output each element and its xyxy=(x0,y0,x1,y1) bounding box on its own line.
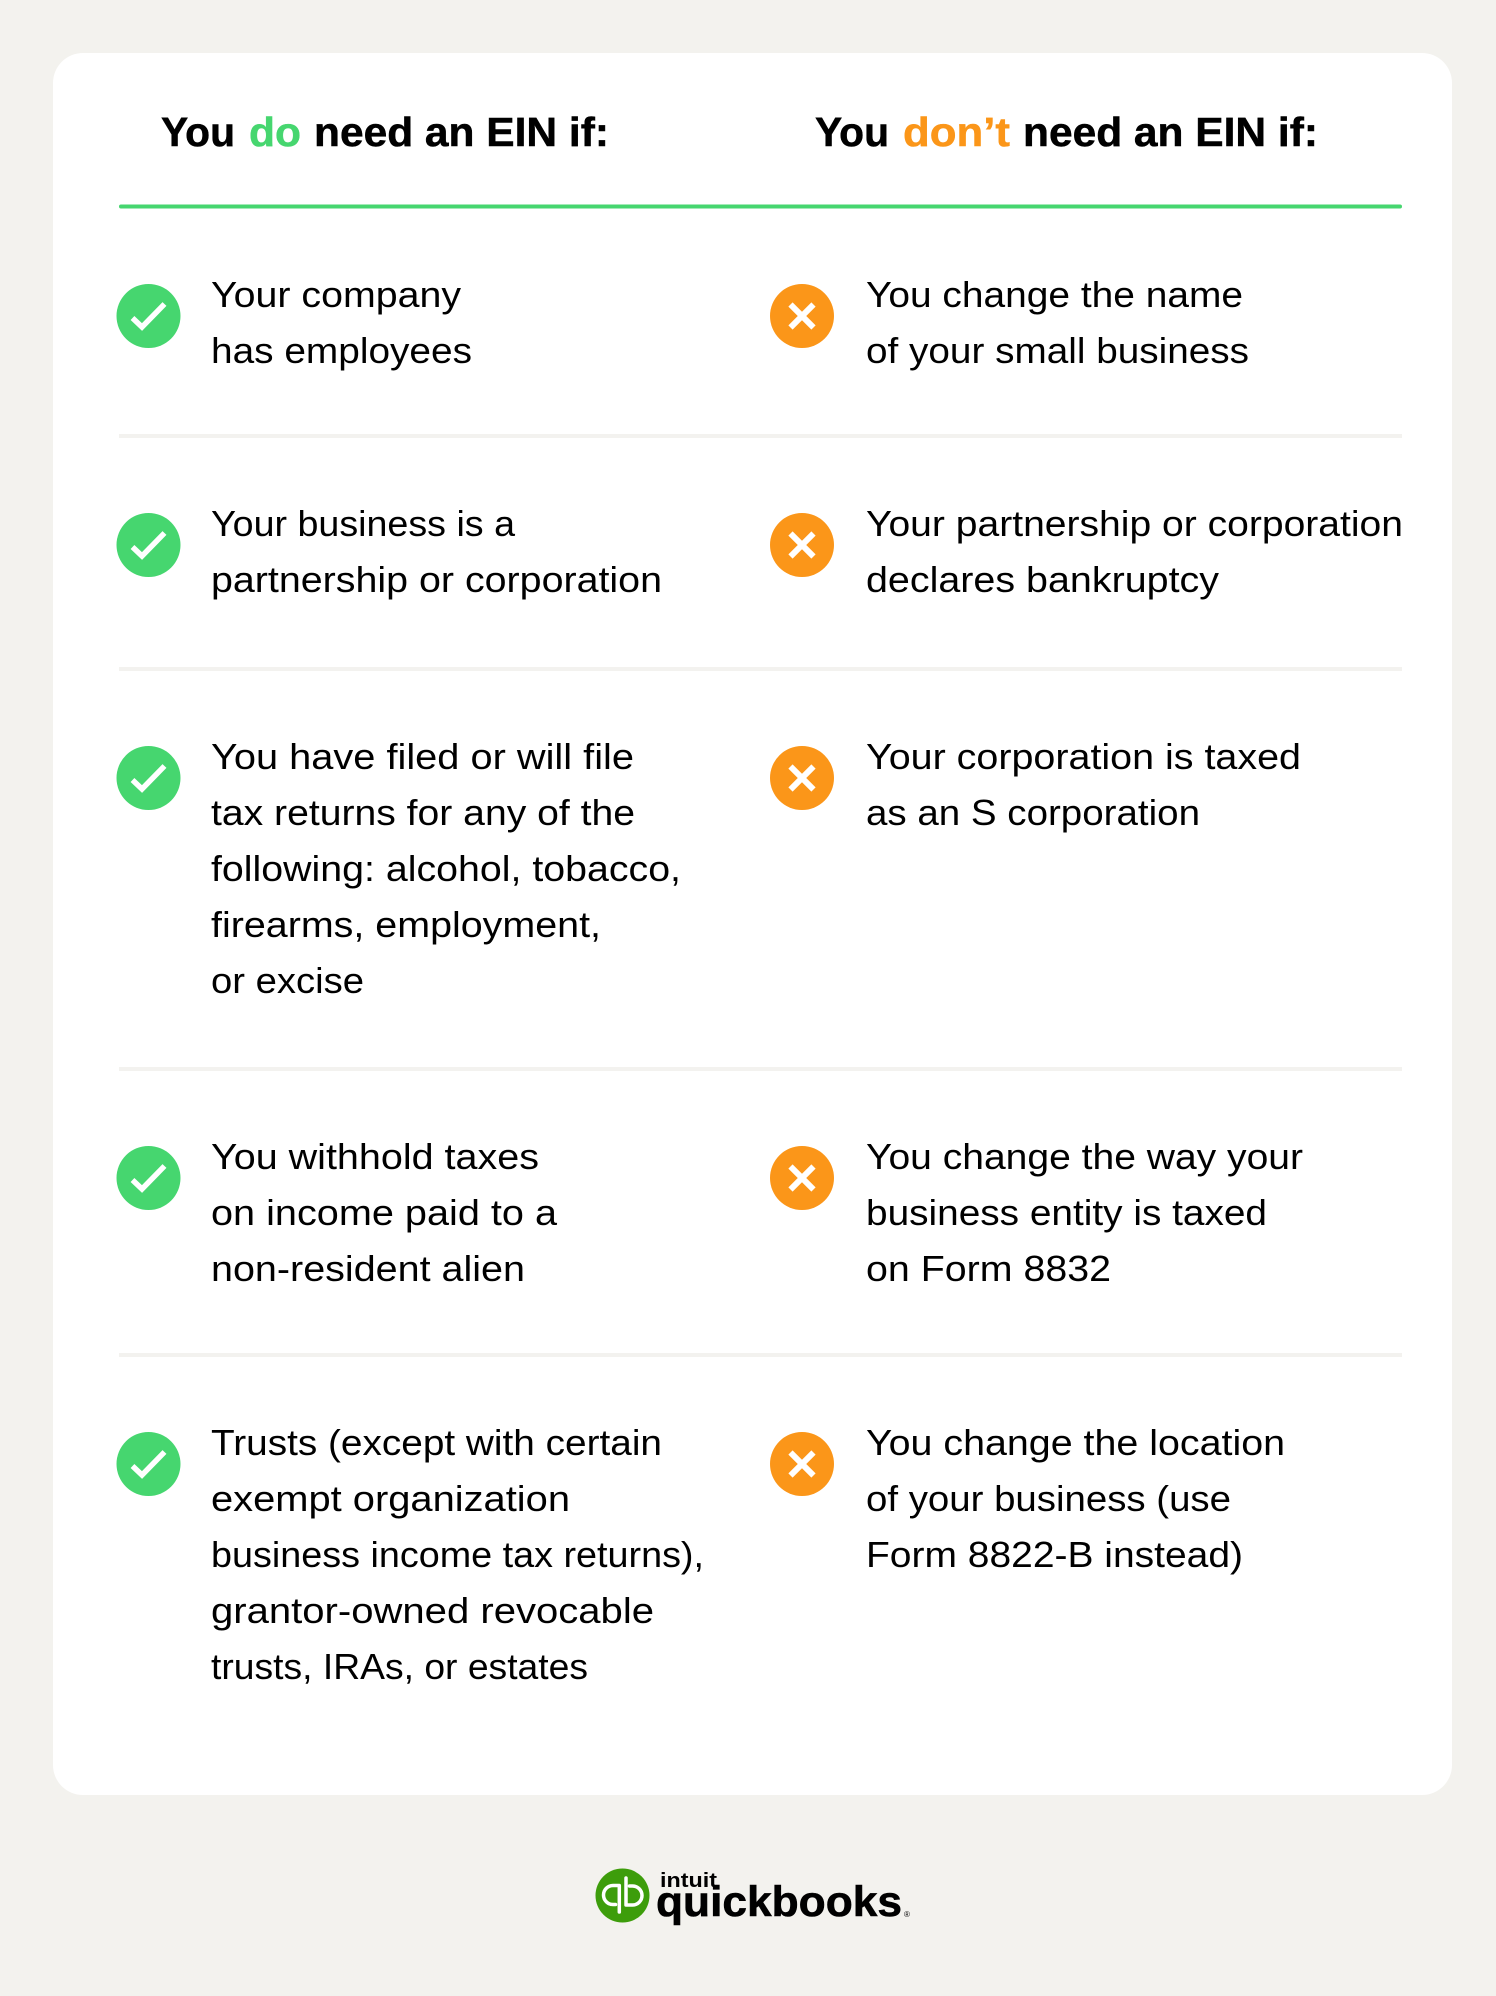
row 2 not needed: bankruptcy xyxy=(770,503,1403,600)
text: bankruptcy xyxy=(866,503,1403,600)
wordmark: intuit: intuit xyxy=(660,1870,717,1892)
icon: green check xyxy=(116,513,180,577)
text: location: You change the location xyxy=(866,1422,1285,1463)
row 4 need: withholding xyxy=(116,1136,558,1289)
icon: orange cross xyxy=(770,1432,834,1496)
icon: green check xyxy=(116,1432,180,1496)
text: withholding: on income paid to a xyxy=(211,1192,558,1233)
heading: you don't need an EIN xyxy=(815,109,1318,155)
icon: quickbooks mark xyxy=(596,1868,650,1922)
heading: you do need an EIN: need an EIN if: xyxy=(314,109,609,155)
heading: you do need an EIN: You xyxy=(161,109,235,155)
row 2 need: partnership xyxy=(116,503,662,600)
text: location: Form 8822-B instead) xyxy=(866,1534,1243,1575)
text: bankruptcy: Your partnership or corporation xyxy=(866,503,1403,544)
icon: orange cross xyxy=(770,1146,834,1210)
text: S corporation xyxy=(866,736,1301,833)
text: tax returns: firearms, employment, xyxy=(211,904,601,945)
row 3 not needed: S corporation xyxy=(770,736,1301,833)
text: trusts: trusts, IRAs, or estates xyxy=(211,1646,588,1687)
text: partnership xyxy=(211,503,662,600)
row 1 need: employees xyxy=(116,274,472,371)
heading: you don't need an EIN: You xyxy=(815,109,889,155)
icon: orange cross xyxy=(770,284,834,348)
text: location: of your business (use xyxy=(866,1478,1231,1519)
text: withholding xyxy=(211,1136,558,1289)
text: withholding: You withhold taxes xyxy=(211,1136,539,1177)
text: trusts: Trusts (except with certain xyxy=(211,1422,662,1463)
text: location xyxy=(866,1422,1285,1575)
text: name change: You change the name xyxy=(866,274,1243,315)
text: employees xyxy=(211,274,472,371)
text: Form 8832 xyxy=(866,1136,1303,1289)
text: trusts xyxy=(211,1422,704,1687)
text: partnership: Your business is a xyxy=(211,503,516,544)
row 4 not needed: Form 8832 xyxy=(770,1136,1303,1289)
icon: green check xyxy=(116,284,180,348)
text: tax returns: tax returns for any of the xyxy=(211,792,635,833)
icon: green check xyxy=(116,746,180,810)
text: tax returns xyxy=(211,736,681,1001)
text: employees: Your company xyxy=(211,274,462,315)
row 1 not needed: name change xyxy=(770,274,1249,371)
text: Form 8832: You change the way your xyxy=(866,1136,1303,1177)
text: employees: has employees xyxy=(211,330,472,371)
icon: orange cross xyxy=(770,513,834,577)
row 5 not needed: location xyxy=(770,1422,1285,1575)
text: trusts: grantor-owned revocable xyxy=(211,1590,654,1631)
text: S corporation: as an S corporation xyxy=(866,792,1200,833)
logo: intuit quickbooks xyxy=(596,1868,910,1926)
icon: green check xyxy=(116,1146,180,1210)
registered mark: ® xyxy=(904,1910,910,1919)
heading: you do need an EIN: do xyxy=(249,109,301,155)
text: Form 8832: on Form 8832 xyxy=(866,1248,1111,1289)
heading: you don't need an EIN: don’t xyxy=(903,109,1010,155)
text: tax returns: or excise xyxy=(211,960,364,1001)
text: name change xyxy=(866,274,1249,371)
text: Form 8832: business entity is taxed xyxy=(866,1192,1267,1233)
icon: orange cross xyxy=(770,746,834,810)
row 5 need: trusts xyxy=(116,1422,704,1687)
row 3 need: tax returns xyxy=(116,736,681,1001)
header divider xyxy=(119,204,1402,208)
text: withholding: non-resident alien xyxy=(211,1248,525,1289)
text: tax returns: following: alcohol, tobacco, xyxy=(211,848,681,889)
text: partnership: partnership or corporation xyxy=(211,559,662,600)
text: name change: of your small business xyxy=(866,330,1249,371)
wordmark: quickbooks: quickbooks xyxy=(656,1878,902,1926)
heading: you do need an EIN xyxy=(161,109,609,155)
text: trusts: business income tax returns), xyxy=(211,1534,704,1575)
text: bankruptcy: declares bankruptcy xyxy=(866,559,1220,600)
text: S corporation: Your corporation is taxed xyxy=(866,736,1301,777)
heading: you don't need an EIN: need an EIN if: xyxy=(1023,109,1318,155)
text: tax returns: You have filed or will file xyxy=(211,736,634,777)
text: trusts: exempt organization xyxy=(211,1478,570,1519)
